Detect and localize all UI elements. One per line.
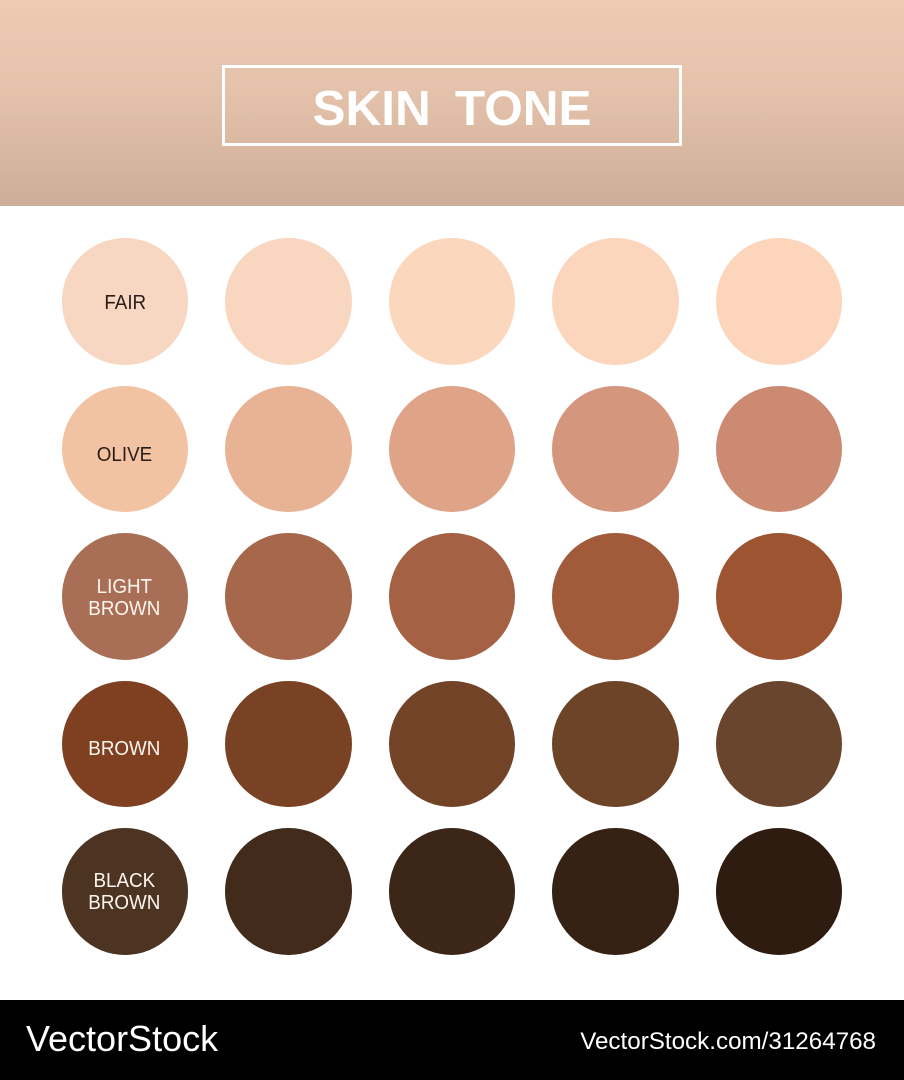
swatch: black brown: BROWN [89, 892, 161, 914]
swatch: light brown 2 [225, 533, 352, 660]
swatch: light brown: BROWN [89, 598, 161, 620]
swatch: fair: FAIR [104, 292, 146, 314]
swatch: olive 3 [389, 386, 515, 512]
swatch: olive 4 [552, 386, 679, 512]
swatch: fair 3 [389, 238, 515, 364]
footer logo: VectorStock [26, 1018, 218, 1059]
swatch: brown 3 [389, 681, 515, 807]
swatch: olive: OLIVE [97, 444, 152, 466]
swatch: light brown 5 [716, 533, 842, 660]
swatch: black brown: BLACK [94, 870, 156, 892]
swatch: black brown 2 [225, 828, 352, 954]
swatch: fair 2 [225, 238, 352, 364]
swatch: fair [62, 238, 188, 364]
swatch: fair 5 [716, 238, 842, 364]
swatch: light brown 4 [552, 533, 679, 660]
swatch: olive 5 [716, 386, 842, 512]
swatch: light brown [62, 533, 188, 660]
swatch: light brown: LIGHT [97, 576, 152, 598]
swatch: brown: BROWN [89, 738, 161, 760]
swatch: brown 2 [225, 681, 352, 807]
title box: SKIN TONE [312, 80, 592, 136]
title box [222, 65, 682, 146]
swatch: brown 4 [552, 681, 679, 807]
swatch: brown 5 [716, 681, 842, 807]
swatch: olive [62, 386, 188, 512]
swatch grid [62, 238, 842, 955]
footer bar [0, 1000, 904, 1080]
swatch: black brown 5 [716, 828, 842, 954]
swatch: brown [62, 681, 188, 807]
swatch: black brown 4 [552, 828, 679, 954]
swatch: black brown 3 [389, 828, 515, 954]
swatch: light brown 3 [389, 533, 515, 660]
header band [0, 0, 904, 206]
swatch: fair 4 [552, 238, 679, 364]
swatch: black brown [62, 828, 188, 954]
swatch: olive 2 [225, 386, 352, 512]
footer url: VectorStock.com/31264768 [580, 1028, 876, 1055]
